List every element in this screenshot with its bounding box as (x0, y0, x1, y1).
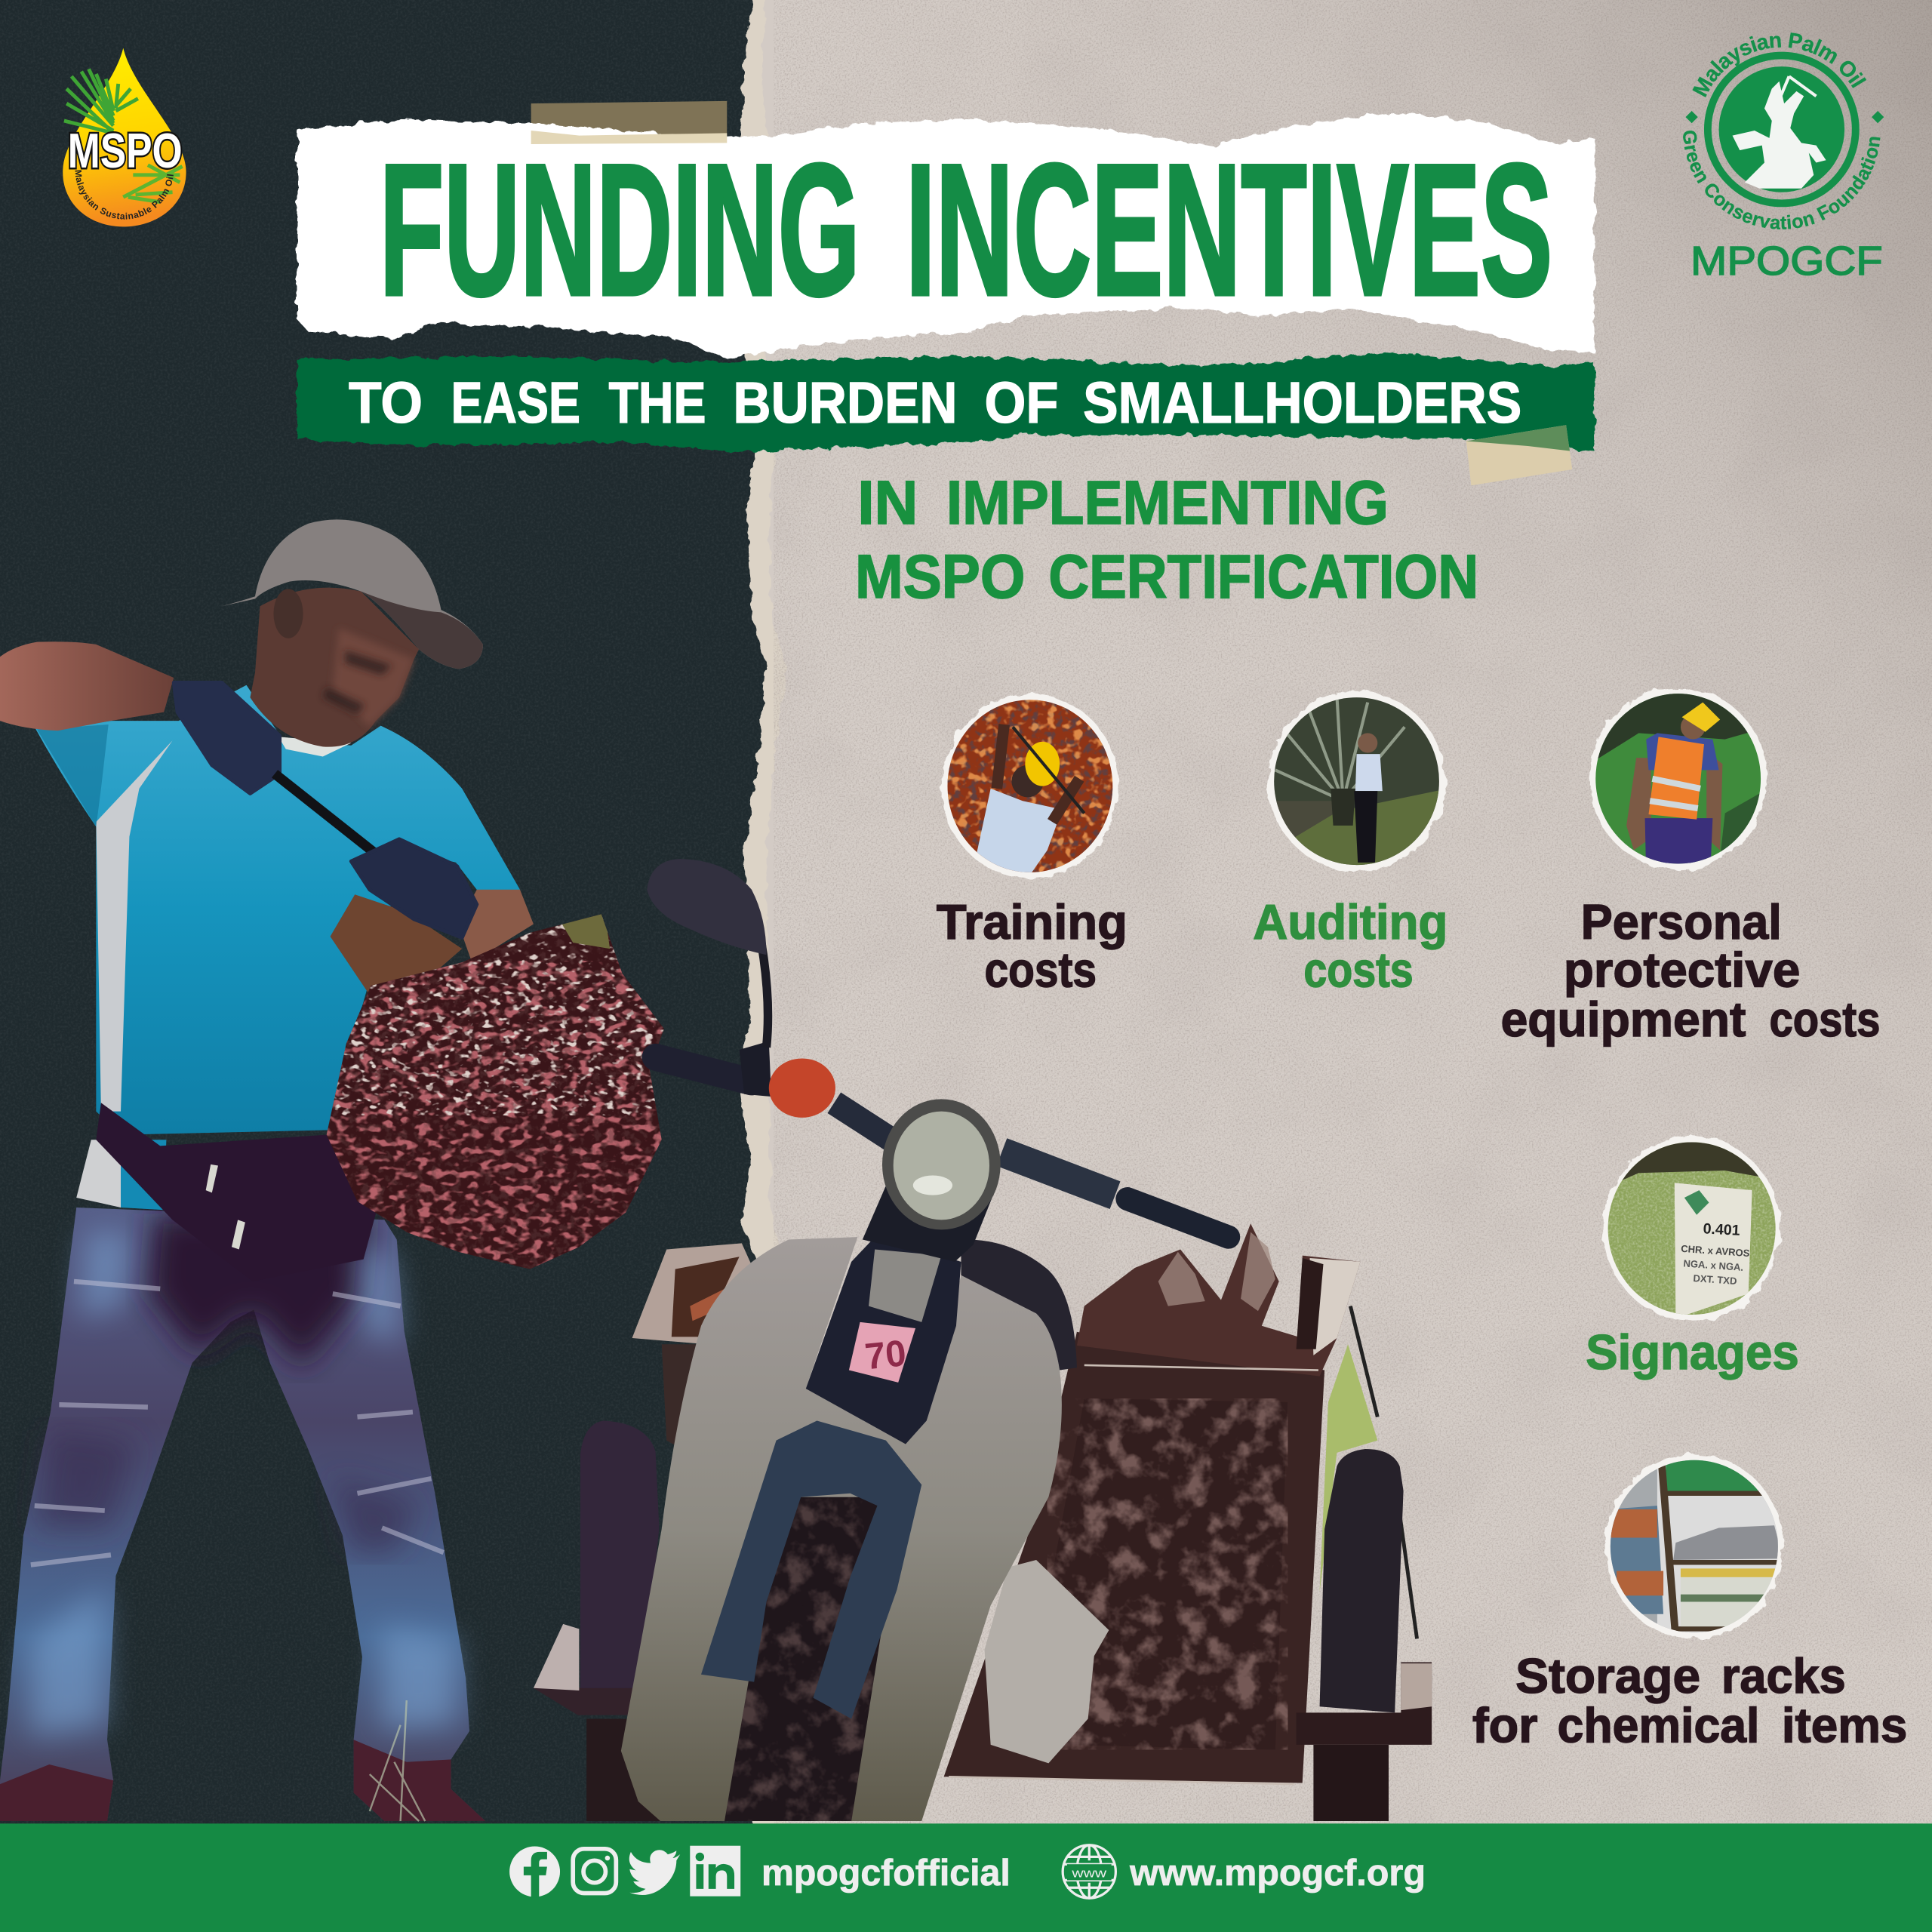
right handlebar (1001, 1152, 1229, 1237)
front fork and fender (701, 1420, 921, 1719)
right tyre (1320, 1449, 1404, 1712)
logo: MSPO oil drop (63, 48, 186, 226)
photo: harvester in fruit pile (943, 696, 1121, 875)
photo: worker in safety vest (1589, 690, 1768, 875)
heading: in implementing MSPO certification: MSPO (855, 543, 1025, 611)
item: personal protective equipment costs (1501, 688, 1880, 1047)
centre column (806, 1237, 961, 1444)
raised arm (0, 641, 174, 731)
title text: FUNDING (380, 125, 860, 334)
palm fruit bunch (320, 906, 672, 1275)
subtitle text: BURDEN (733, 371, 958, 435)
label: protective (1564, 943, 1800, 998)
cap (222, 519, 483, 669)
heading: in implementing MSPO certification: IN (857, 469, 918, 537)
heading: in implementing MSPO certification: CERTIFICATION (1048, 543, 1478, 611)
photo: plantation sign: 0.401 (1703, 1220, 1740, 1239)
seal arc text: Green Conservation Foundation: Green Conservation Foundation (1683, 131, 1881, 229)
fruit stalk (331, 894, 462, 1004)
sidecar box (944, 1223, 1417, 1784)
photo: plantation sign: NGA. x NGA. (1683, 1257, 1744, 1273)
label: items (1782, 1698, 1907, 1753)
icon: instagram (573, 1849, 616, 1894)
tool handle (275, 774, 376, 854)
label: chemical (1558, 1698, 1759, 1753)
photo: chemical storage rack (1601, 1454, 1786, 1638)
seal arc text: Malaysian Palm Oil: Malaysian Palm Oil (1692, 32, 1866, 97)
indicator housing (869, 1250, 941, 1322)
headlamp (882, 1099, 1001, 1229)
subtitle band: dark green torn paper (297, 352, 1595, 452)
label: equipment (1501, 992, 1746, 1047)
subtitle text: THE (609, 371, 706, 435)
front wheel (724, 1497, 881, 1821)
fuel sacks (984, 1560, 1109, 1763)
title banner: white torn paper (297, 112, 1595, 358)
item: storage racks for chemical items (1472, 1454, 1907, 1753)
photo: plantation sign: CHR. x AVROS (1681, 1243, 1750, 1259)
photo: motorcycle with sidecar cart (534, 859, 1432, 1823)
item: auditing costs (1253, 690, 1447, 998)
label: Signages (1586, 1324, 1799, 1380)
icon: palm frond (64, 69, 183, 202)
heading: in implementing MSPO certification (855, 469, 1478, 611)
label (1472, 1648, 1907, 1753)
icon: globe (1063, 1845, 1115, 1898)
label: costs (984, 943, 1097, 998)
item: signages (1586, 1136, 1799, 1380)
icon: monkey figure silhouette (1733, 76, 1826, 189)
icon: linkedin (690, 1846, 740, 1897)
logo caption: Malaysian Sustainable Palm Oil: Malaysian Sustainable Palm Oil (75, 170, 174, 220)
leg shield (621, 1237, 1062, 1821)
forearm (458, 890, 534, 962)
number plate (849, 1322, 915, 1383)
glove: lower hand (351, 839, 477, 937)
label: for (1472, 1698, 1538, 1753)
cart left rear leg (586, 1719, 690, 1821)
website text: www.mpogcf.org (1129, 1853, 1426, 1894)
cart left top corner (632, 1243, 753, 1454)
label (937, 894, 1128, 998)
item: training costs (937, 694, 1128, 998)
label: Personal (1581, 894, 1782, 949)
subtitle text: SMALLHOLDERS (1083, 371, 1521, 435)
photo: plantation sign: DXT. TXD (1693, 1272, 1737, 1287)
heading: in implementing MSPO certification: IMPLEMENTING (946, 469, 1389, 537)
cart right frame (1297, 1662, 1432, 1821)
logo: MPOGCF foundation seal (1678, 28, 1884, 284)
logo wordmark: MSPO: MSPO (68, 123, 183, 178)
label: costs (1303, 943, 1414, 998)
glove: upper hand (174, 682, 280, 793)
label: racks (1721, 1648, 1846, 1703)
number plate: 70 (863, 1333, 908, 1377)
tape: bottom strip (1466, 425, 1572, 485)
photo: plantation sign (1601, 1140, 1780, 1318)
label (1501, 894, 1880, 1047)
left tyre (580, 1420, 659, 1688)
shirt (35, 685, 520, 1210)
left handlebar (656, 1041, 894, 1141)
cart left frame (534, 1624, 641, 1715)
headlamp neck (863, 1183, 998, 1262)
icon: globe: www (1071, 1866, 1106, 1880)
seal name: MPOGCF: MPOGCF (1690, 238, 1883, 284)
photo: worker harvesting oil palm fruit (0, 519, 672, 1821)
icon: facebook (509, 1847, 560, 1897)
label (1253, 894, 1447, 998)
indicator lamp (769, 1058, 835, 1118)
label: Training (937, 894, 1128, 949)
label: costs (1769, 992, 1880, 1047)
photo: auditor in plantation (1269, 690, 1447, 875)
subtitle text: TO (349, 371, 423, 435)
jeans (0, 1208, 485, 1821)
neck and face (250, 588, 419, 747)
footer bar (0, 1823, 1932, 1932)
waist bag (96, 1103, 376, 1281)
dark rear body (961, 1239, 1077, 1371)
background: torn light paper panel (740, 0, 1932, 1848)
subtitle text: EASE (451, 371, 580, 435)
subtitle text: OF (984, 371, 1058, 435)
label: Storage (1515, 1648, 1700, 1703)
mirror (647, 859, 768, 1048)
tape: top strip (531, 101, 727, 144)
label: Auditing (1253, 894, 1447, 949)
handle text: mpogcfofficial (761, 1853, 1011, 1894)
icon: twitter (629, 1850, 680, 1895)
subtitle text (349, 371, 1521, 435)
cap brim shadow (361, 592, 483, 669)
